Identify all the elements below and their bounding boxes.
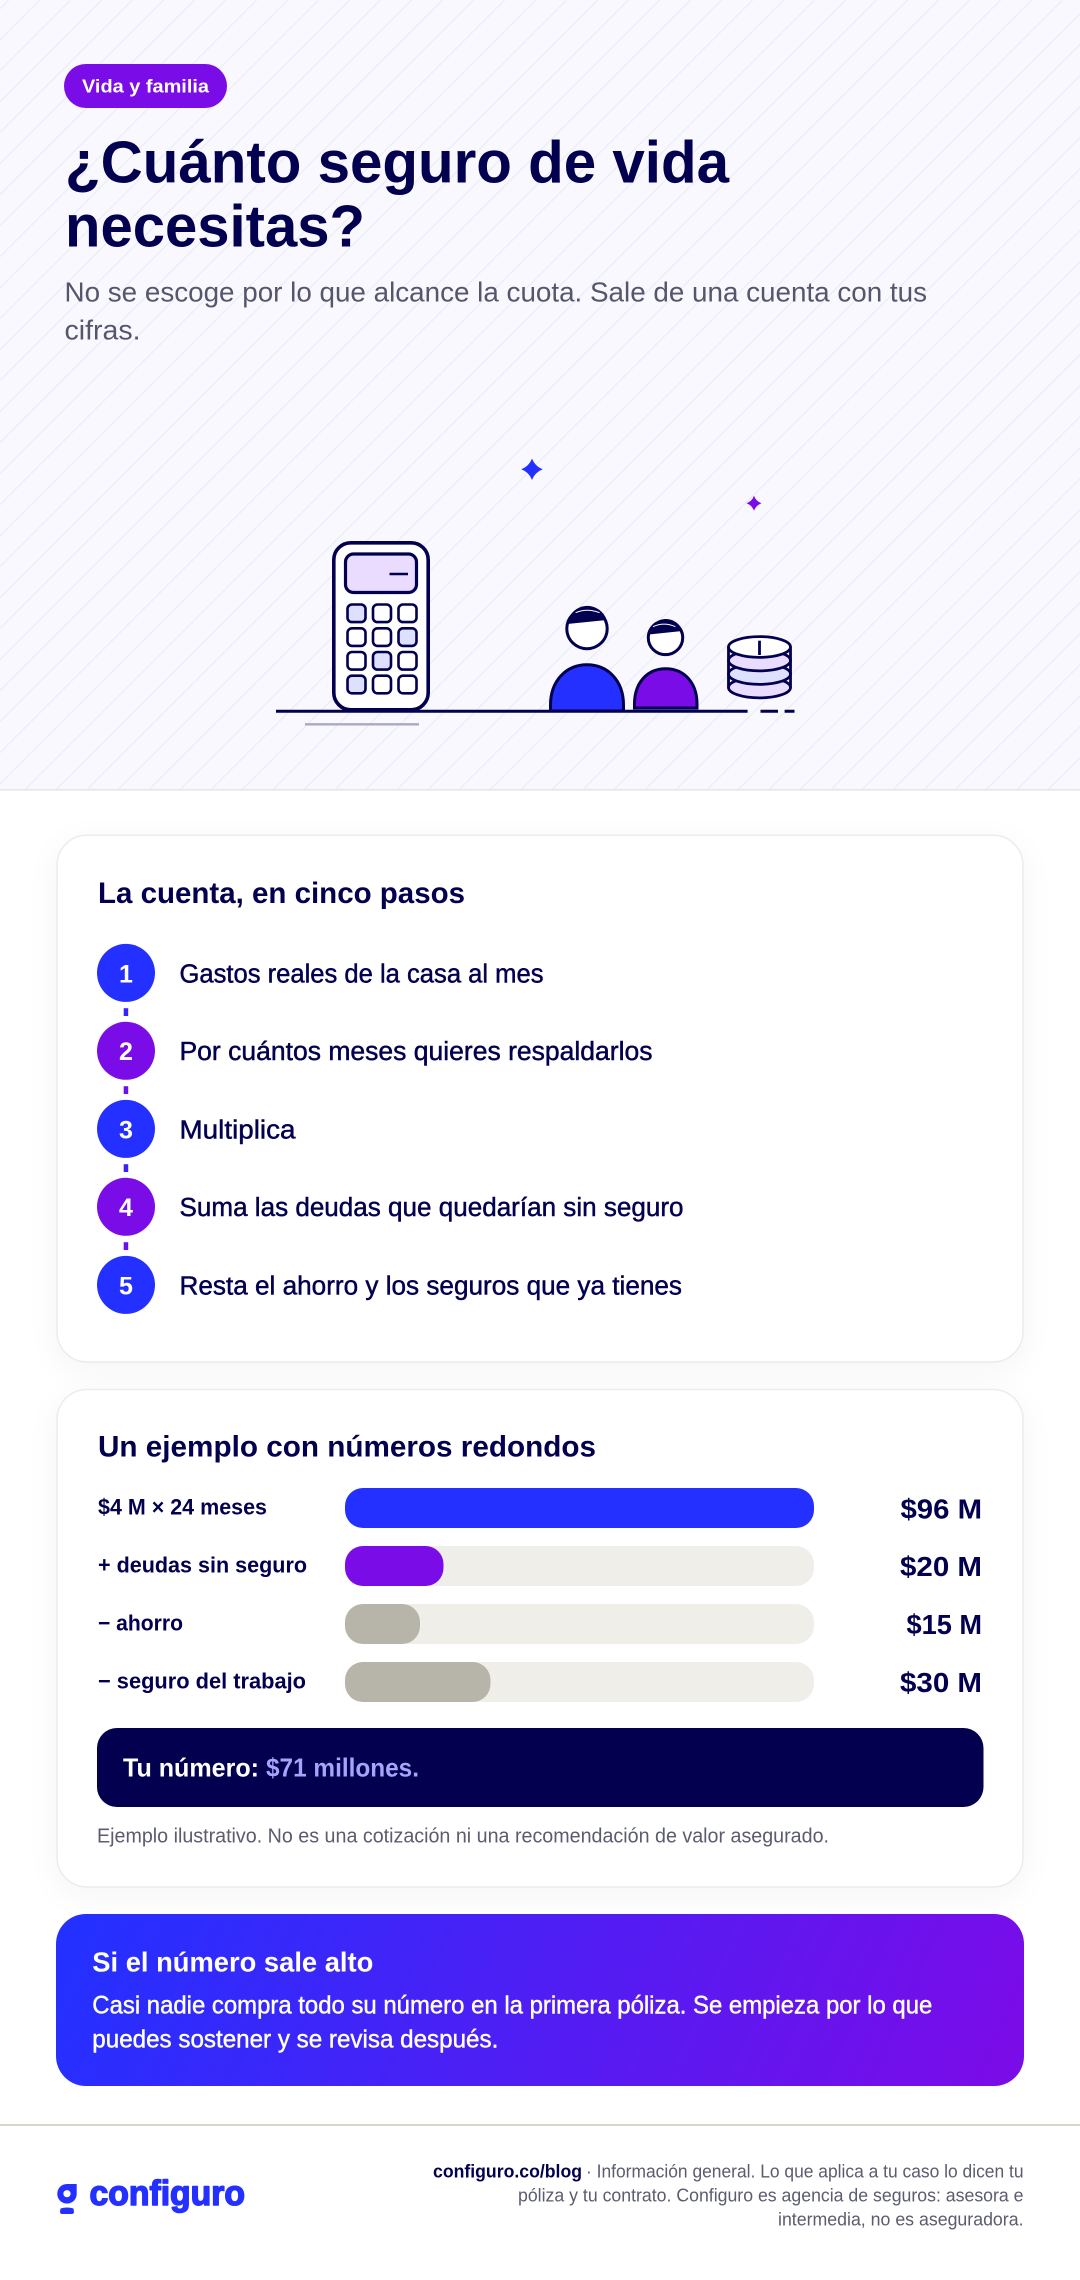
- row: ahorro: − ahorro: [98, 1611, 183, 1636]
- step 1: Gastos reales de la casa al mes: [180, 960, 544, 988]
- step 4: Suma las deudas que quedarían sin seguro: [180, 1194, 684, 1222]
- logo: [57, 2174, 245, 2214]
- step 4: 4: [119, 1194, 133, 1222]
- panel: example: [57, 1390, 1023, 1887]
- step 2: Por cuántos meses quieres respaldarlos: [180, 1038, 652, 1066]
- row: ahorro: $15 M: [906, 1609, 982, 1640]
- step 2: 2: [119, 1038, 133, 1066]
- callout: result: Tu número:: [123, 1753, 259, 1783]
- step 5: 5: [119, 1272, 133, 1300]
- footer text: póliza y tu contrato. Configuro es agencia de seguros: asesora e: [518, 2185, 1024, 2206]
- title: ¿Cuánto seguro de vida: [65, 130, 730, 196]
- row: ahorro: [98, 1604, 982, 1644]
- row: base: $4 M × 24 meses: [98, 1495, 267, 1520]
- badge: Vida y familia: Vida y familia: [82, 76, 210, 96]
- footer text: · Información general. Lo que aplica a tu caso lo dicen tu: [586, 2161, 1024, 2182]
- panel: hero: [0, 0, 1080, 791]
- step 3: [97, 1100, 296, 1158]
- step 5: [97, 1256, 682, 1314]
- footer: [0, 2124, 1080, 2230]
- row: deudas: [98, 1546, 982, 1586]
- subtitle: No se escoge por lo que alcance la cuota. Sale de una cuenta con tus: [64, 277, 927, 308]
- illustration: ground line: [276, 711, 794, 724]
- row: seguro del trabajo: $30 M: [900, 1667, 982, 1698]
- subtitle: [64, 277, 927, 345]
- step 3: 3: [119, 1116, 133, 1144]
- step 3: Multiplica: [180, 1116, 296, 1144]
- note: Ejemplo ilustrativo. No es una cotización ni una recomendación de valor asegurado.: [97, 1826, 829, 1848]
- icon: purple sparkle: [746, 496, 762, 511]
- title: necesitas?: [65, 194, 365, 260]
- body: advice: [92, 1991, 932, 2054]
- bar chart: [98, 1488, 982, 1702]
- logo wordmark: configuro: [90, 2174, 245, 2213]
- icon: child figure: [634, 619, 697, 708]
- title: [65, 130, 730, 260]
- step 4: [97, 1178, 684, 1236]
- body: advice: puedes sostener y se revisa después.: [92, 2026, 498, 2054]
- heading: example: Un ejemplo con números redondos: [98, 1431, 596, 1464]
- step 1: 1: [119, 960, 133, 988]
- heading: steps: La cuenta, en cinco pasos: [98, 877, 465, 910]
- footer text: [433, 2161, 1024, 2230]
- panel: five steps: [57, 835, 1023, 1362]
- row: seguro del trabajo: [98, 1662, 982, 1702]
- body: advice: Casi nadie compra todo su número en la primera póliza. Se empieza por lo que: [92, 1991, 932, 2019]
- icon: adult figure: [550, 606, 624, 711]
- connector dashes: [124, 1008, 128, 1250]
- row: seguro del trabajo: − seguro del trabajo: [98, 1669, 306, 1694]
- heading: advice: Si el número sale alto: [92, 1947, 373, 1978]
- footer text: configuro.co/blog: [433, 2161, 582, 2182]
- step 1: [97, 944, 544, 1002]
- panel: advice callout: [56, 1914, 1024, 2086]
- icon: blue sparkle: [521, 459, 543, 480]
- row: deudas: + deudas sin seguro: [98, 1553, 307, 1578]
- row: deudas: $20 M: [900, 1551, 982, 1582]
- step 5: Resta el ahorro y los seguros que ya tienes: [180, 1272, 682, 1300]
- icon: coin stack: [728, 637, 790, 698]
- icon: calculator: [334, 543, 428, 710]
- callout: result: [97, 1728, 984, 1807]
- row: base: $96 M: [900, 1493, 982, 1524]
- row: base: [98, 1488, 982, 1528]
- callout: result: $71 millones.: [266, 1753, 419, 1783]
- step 2: [97, 1022, 652, 1080]
- footer text: intermedia, no es aseguradora.: [778, 2209, 1024, 2230]
- badge: Vida y familia: [64, 64, 227, 108]
- logo icon: [57, 2184, 77, 2214]
- subtitle: cifras.: [64, 314, 140, 345]
